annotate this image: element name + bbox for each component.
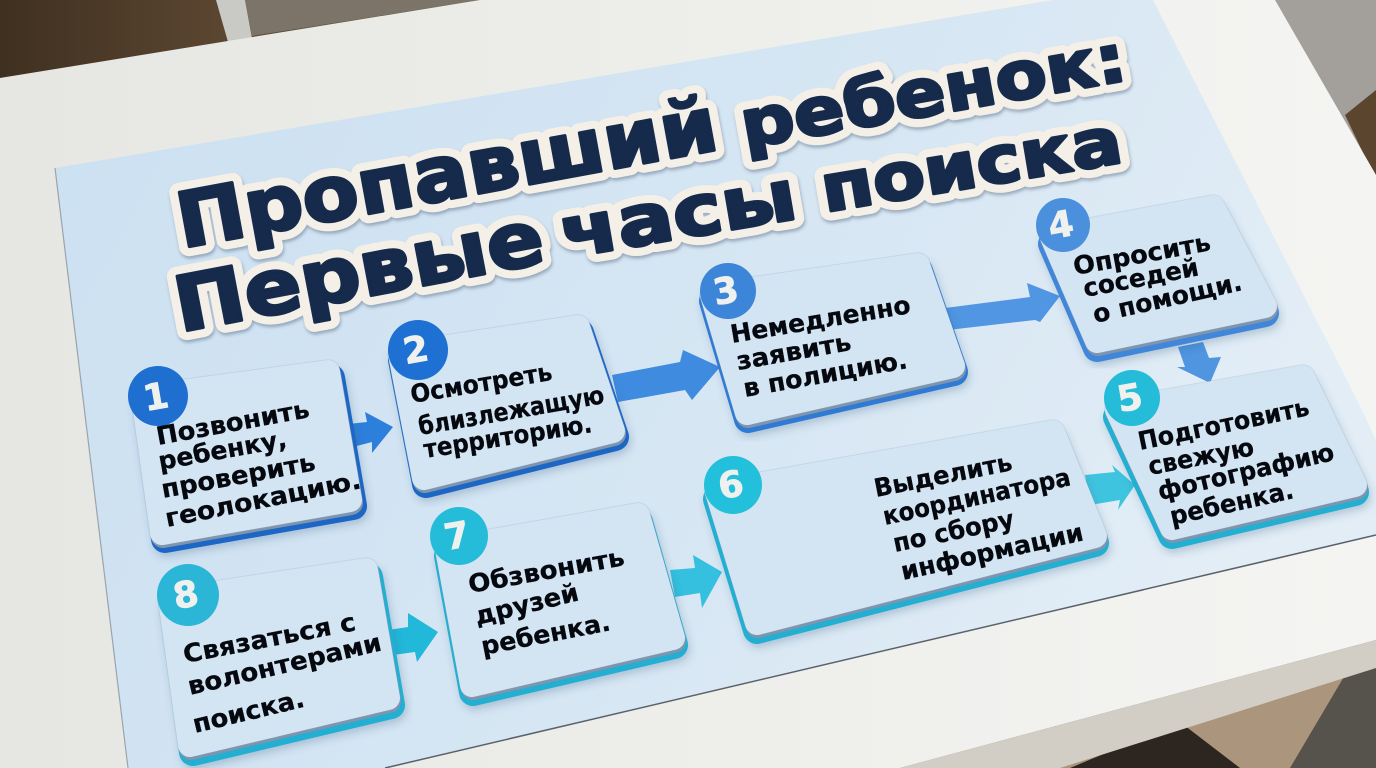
text: step 7: друзей <box>472 578 581 631</box>
table front edge <box>900 640 1376 768</box>
arrow: step 6 to step 5 <box>1085 465 1135 510</box>
badge 5: 5 <box>1114 376 1146 421</box>
text: step 4: о помощи. <box>1090 267 1245 329</box>
text: step 1: Позвонить <box>154 394 312 451</box>
badge 1: 1 <box>140 375 172 420</box>
badge 4 <box>1036 198 1090 252</box>
panel: step 1 <box>128 366 363 539</box>
arrow: step 7 to step 6 <box>670 555 722 608</box>
arrow: step 1 to step 2 <box>348 412 393 453</box>
title: Пропавший ребенок: Первые часы поиска: ребенок: <box>734 20 1132 164</box>
text: step 7: ребенка. <box>479 607 613 661</box>
text: step 4 <box>1071 228 1245 329</box>
badge 1 <box>128 366 188 426</box>
arrow: step 2 to step 3 <box>612 350 720 402</box>
text: step 6: информации <box>898 518 1086 586</box>
text: step 7: Обзвонить <box>466 542 627 599</box>
text: step 3 <box>728 290 912 403</box>
text: step 6: Выделить <box>872 447 1015 503</box>
text: step 5: свежую <box>1146 432 1256 481</box>
title: Пропавший ребенок: Первые часы поиска: поиска <box>815 104 1127 228</box>
text: step 8: волонтерами <box>185 628 384 701</box>
text: step 2: близлежащую <box>416 380 606 441</box>
text: step 1: проверить <box>159 447 318 504</box>
panel: step 5 <box>1104 370 1356 535</box>
panel: step 7 <box>430 507 674 692</box>
poster shadow line <box>385 535 1376 768</box>
text: step 8: Связаться с <box>181 607 358 669</box>
title: Пропавший ребенок: Первые часы поиска: поиска <box>815 104 1127 228</box>
text: step 2: Осмотреть <box>408 357 554 409</box>
panel: step 8 <box>157 564 391 752</box>
text: step 4: соседей <box>1081 252 1201 303</box>
badge 2 <box>388 320 448 380</box>
arrow: step 4 to step 5 <box>1177 342 1221 383</box>
title: Пропавший ребенок: Первые часы поиска: часы <box>554 154 802 275</box>
text: step 2 <box>408 357 606 464</box>
poster bottom edge <box>55 168 128 768</box>
arrow: step 8 to step 7 <box>388 613 438 662</box>
badge 8 <box>157 564 219 626</box>
title: Пропавший ребенок: Первые часы поиска: Пропавший <box>169 79 724 266</box>
text: step 5: фотографию <box>1155 437 1337 506</box>
panel: step 4 <box>1036 198 1266 348</box>
text: step 3: заявить <box>734 327 853 376</box>
text: step 5: Подготовить <box>1135 392 1312 456</box>
badge 7: 7 <box>441 514 473 559</box>
badge 5 <box>1104 370 1160 426</box>
title: Пропавший ребенок: Первые часы поиска: Первые <box>167 192 551 350</box>
badge 4: 4 <box>1045 203 1077 248</box>
badge 3: 3 <box>710 269 742 314</box>
panel: step 3 <box>700 263 954 419</box>
text: step 2: территорию. <box>421 409 594 464</box>
badge 6: 6 <box>715 463 747 508</box>
text: step 6: по сбору <box>890 504 1017 558</box>
text: step 7 <box>466 542 627 661</box>
title: Пропавший ребенок: Первые часы поиска: ребенок: <box>734 20 1132 164</box>
text: step 5 <box>1135 392 1337 531</box>
title: Пропавший ребенок: Первые часы поиска: Первые <box>167 192 551 350</box>
badge 6 <box>704 456 762 514</box>
text: step 6 <box>872 447 1086 586</box>
text: step 5: ребенка. <box>1167 475 1296 531</box>
title: Пропавший ребенок: Первые часы поиска <box>167 20 1132 350</box>
text: step 4: Опросить <box>1071 228 1213 281</box>
arrow: step 3 to step 4 <box>945 283 1060 330</box>
text: step 3: Немедленно <box>728 290 912 349</box>
text: step 8: поиска. <box>190 684 307 739</box>
badge 3 <box>700 263 756 319</box>
text: step 1 <box>154 394 363 533</box>
badge 2: 2 <box>400 328 432 373</box>
badge 7 <box>430 507 488 565</box>
title: Пропавший ребенок: Первые часы поиска: часы <box>554 154 802 275</box>
text: step 1: геолокацию. <box>162 465 363 533</box>
panel: step 2 <box>388 320 615 484</box>
text: step 1: ребенку, <box>156 424 289 476</box>
text: step 3: в полицию. <box>741 345 909 403</box>
text: step 6: координатора <box>880 462 1073 531</box>
panel: step 6 <box>704 432 1096 630</box>
text: step 8 <box>181 607 384 739</box>
badge 8: 8 <box>170 573 202 618</box>
title: Пропавший ребенок: Первые часы поиска: Пропавший <box>169 79 724 266</box>
